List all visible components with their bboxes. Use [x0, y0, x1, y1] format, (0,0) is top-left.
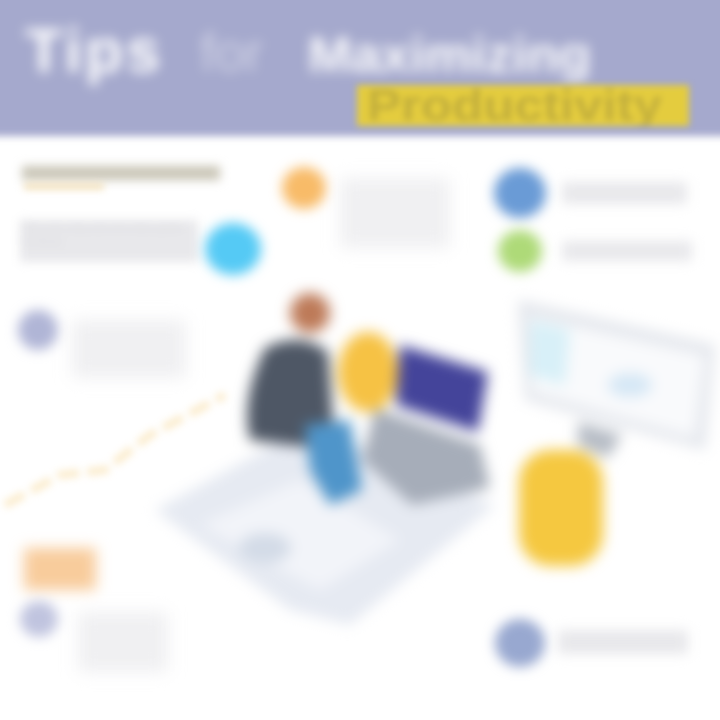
icon: lower left purple circle — [20, 601, 58, 637]
text: lower right — [558, 630, 688, 654]
title: Tips — [25, 17, 163, 86]
monitor — [518, 300, 715, 458]
intro text block — [16, 160, 226, 264]
text: second right — [562, 241, 692, 261]
text: top right — [562, 182, 687, 204]
yellow cylinder — [519, 450, 603, 566]
yellow coin — [338, 332, 398, 412]
chart line: dotted orange trend — [2, 390, 228, 510]
title — [22, 17, 594, 90]
text: left middle — [72, 320, 186, 378]
intro text block: Plan your day and set clear goals for focus — [20, 221, 183, 248]
icon: cloud — [205, 223, 261, 275]
person — [247, 293, 362, 505]
platform — [155, 425, 495, 625]
title: Maximizing — [308, 27, 591, 83]
icon: orange bars — [24, 548, 96, 590]
icon: green circle — [498, 230, 542, 272]
icon: lower right blue circle — [495, 619, 545, 667]
title: for — [200, 23, 263, 83]
header band — [0, 0, 720, 136]
icon: left purple circle — [18, 310, 58, 350]
text: lower left — [78, 612, 168, 672]
text: top middle — [340, 178, 450, 248]
laptop — [362, 345, 490, 505]
icon: orange circle — [282, 167, 326, 209]
icon: blue circle — [494, 168, 546, 218]
